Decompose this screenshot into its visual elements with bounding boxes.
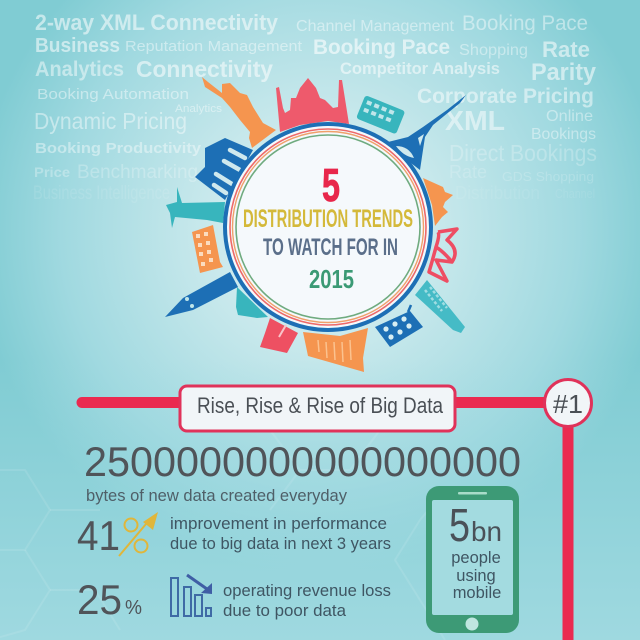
word cloud: Parity bbox=[531, 59, 597, 86]
word cloud: Connectivity bbox=[136, 56, 273, 82]
phone: 5bn people using mobile: people bbox=[451, 549, 501, 567]
word cloud: Channel Management bbox=[296, 18, 455, 35]
stat: 25 percent: 25 bbox=[77, 576, 122, 623]
icon: teal building bottom left bbox=[236, 287, 268, 318]
title year: 2015 bbox=[309, 264, 354, 294]
word cloud: Benchmarking bbox=[77, 162, 198, 183]
word cloud: Booking Pace bbox=[462, 12, 588, 35]
word cloud bbox=[33, 10, 597, 204]
icon: eiffel tower bbox=[388, 95, 466, 170]
icon: orange building right bbox=[423, 178, 453, 226]
word cloud: Dynamic Pricing bbox=[34, 108, 187, 134]
stat text: performance bbox=[170, 515, 391, 553]
icon: big ben bbox=[165, 272, 238, 317]
word cloud: Competitor Analysis bbox=[340, 59, 500, 78]
word cloud: Analytics bbox=[175, 103, 223, 115]
word cloud: Reputation Management bbox=[125, 38, 303, 55]
icon: orange grid building bbox=[192, 225, 223, 273]
section heading: Rise, Rise & Rise of Big Data bbox=[197, 393, 444, 418]
stat: 41 percent bbox=[77, 512, 158, 559]
word cloud: Online bbox=[546, 108, 593, 125]
big number caption: bytes of new data created everyday bbox=[86, 486, 347, 505]
icon: red building bottom bbox=[260, 318, 298, 353]
stat: 41 percent: 41 bbox=[77, 512, 120, 559]
stat: 25 percent: % bbox=[125, 597, 142, 619]
icon: opera house bbox=[429, 229, 457, 281]
title number: 5 bbox=[322, 159, 340, 211]
stat text: performance: improvement in performance bbox=[170, 515, 387, 533]
word cloud: Analytics bbox=[35, 58, 124, 81]
title line one: DISTRIBUTION TRENDS bbox=[243, 205, 413, 233]
icon: orange building bottom bbox=[303, 328, 368, 372]
icon: percent arrow bbox=[119, 512, 158, 556]
word cloud: Rate bbox=[542, 37, 590, 62]
section heading bbox=[180, 386, 455, 431]
word cloud: GDS Shopping bbox=[502, 169, 594, 184]
icon: classical building bbox=[195, 138, 253, 200]
word cloud: Business Intelligence bbox=[33, 183, 170, 204]
stat text: revenue: operating revenue loss bbox=[223, 582, 391, 600]
word cloud: 2-way XML Connectivity bbox=[35, 10, 279, 35]
word cloud: Channel bbox=[555, 186, 595, 201]
icon: statue of liberty bbox=[202, 77, 276, 148]
phone: 5bn people using mobile: using bbox=[456, 567, 496, 585]
phone: 5bn people using mobile: mobile bbox=[453, 584, 501, 602]
section number badge: #1 bbox=[553, 389, 583, 419]
big number: 2500000000000000000 bbox=[84, 438, 521, 485]
icon: falling bars bbox=[171, 575, 212, 616]
stat text: performance: due to big data in next 3 years bbox=[170, 535, 391, 553]
phone: 5bn people using mobile: bn bbox=[471, 516, 502, 547]
stat text: revenue bbox=[223, 582, 391, 620]
word cloud: XML bbox=[445, 105, 505, 136]
phone: 5bn people using mobile bbox=[426, 486, 519, 633]
title line two: TO WATCH FOR IN bbox=[263, 234, 398, 261]
word cloud: Booking Pace bbox=[313, 36, 450, 59]
section connector line bbox=[82, 402, 568, 640]
icon: taj mahal bbox=[276, 78, 349, 132]
stat text: revenue: due to poor data bbox=[223, 602, 347, 620]
word cloud: Booking Productivity bbox=[35, 140, 202, 157]
section number badge bbox=[544, 380, 592, 426]
word cloud: Price bbox=[34, 164, 70, 180]
word cloud: Shopping bbox=[459, 42, 528, 59]
word cloud: Corporate Pricing bbox=[417, 85, 594, 108]
phone: 5bn people using mobile: 5 bbox=[449, 499, 470, 551]
word cloud: Distribution bbox=[455, 183, 540, 203]
word cloud: Direct Bookings bbox=[449, 140, 597, 166]
icon: tram bbox=[375, 305, 423, 347]
icon: double decker bus bbox=[356, 95, 405, 134]
word cloud: Business bbox=[35, 35, 120, 57]
icon: christ the redeemer bbox=[166, 187, 225, 228]
title badge bbox=[225, 124, 431, 330]
icon: leaning tower bbox=[415, 280, 465, 333]
word cloud: Rate bbox=[449, 162, 487, 182]
word cloud: Bookings bbox=[531, 126, 596, 143]
word cloud: Booking Automation bbox=[37, 86, 189, 103]
